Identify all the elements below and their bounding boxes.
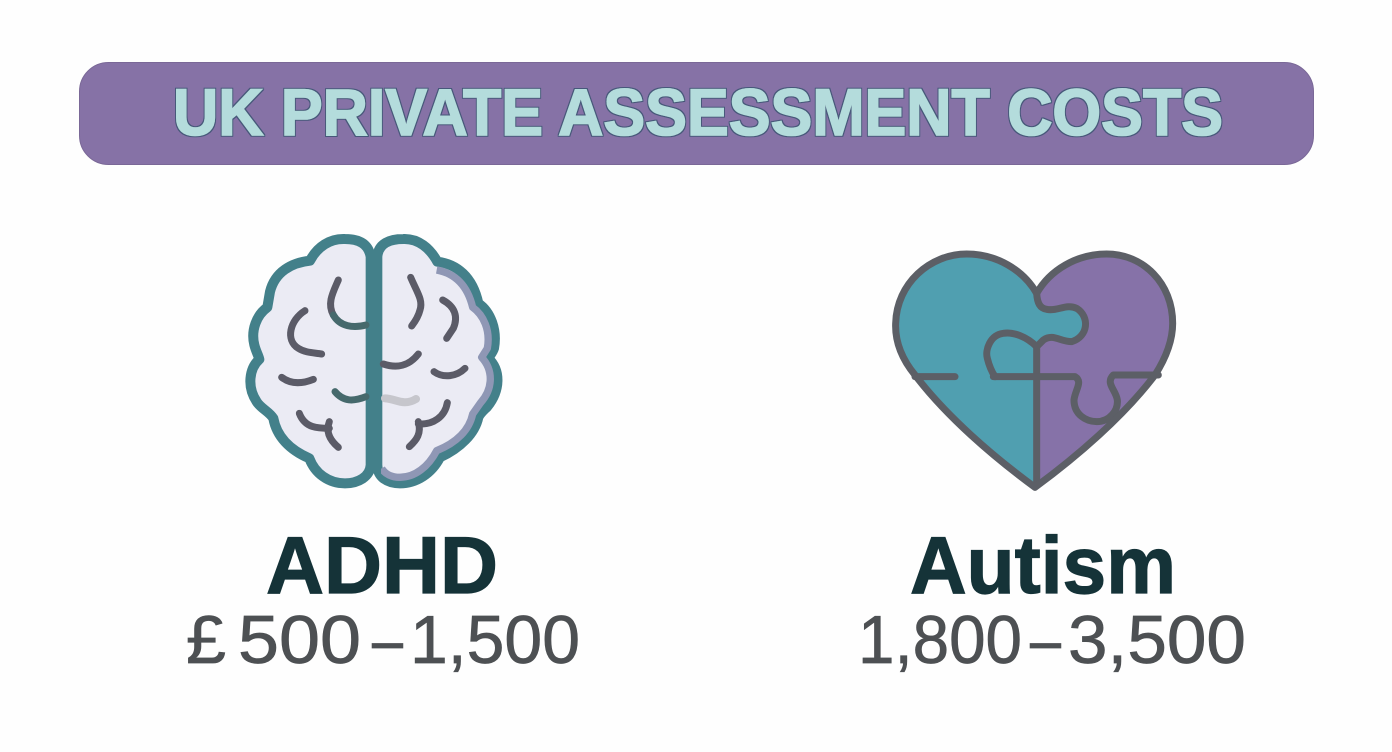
price: Autism cost bbox=[858, 602, 1246, 678]
heading: Autism: Autism bbox=[910, 521, 1176, 611]
price: ADHD cost: 1,500 bbox=[410, 602, 580, 678]
price: ADHD cost: £ bbox=[186, 602, 226, 678]
banner pill bbox=[80, 62, 1314, 164]
brain central divide bbox=[352, 252, 396, 473]
title banner bbox=[80, 62, 1314, 164]
title text: UK PRIVATE ASSESSMENT COSTS bbox=[173, 75, 1223, 149]
brain left hemisphere bbox=[250, 239, 371, 483]
price: Autism cost: 3,500 bbox=[1068, 602, 1246, 678]
icon: brain bbox=[250, 239, 497, 483]
brain right shading band bbox=[382, 270, 490, 477]
heart puzzle lines bbox=[896, 254, 1173, 487]
heading: ADHD: ADHD bbox=[266, 521, 498, 611]
price: ADHD cost: – bbox=[372, 602, 403, 678]
infographic canvas bbox=[79, 62, 1314, 672]
heart purple piece bbox=[1040, 258, 1170, 479]
icon: puzzle heart bbox=[896, 240, 1180, 493]
brain folds bbox=[282, 277, 465, 447]
heart teal piece bbox=[896, 254, 1173, 487]
brain right hemisphere bbox=[377, 239, 497, 483]
price: ADHD cost: 500 bbox=[238, 602, 361, 678]
price: Autism cost: – bbox=[1030, 602, 1061, 678]
price: ADHD cost bbox=[186, 602, 580, 678]
price: Autism cost: 1,800 bbox=[858, 602, 1022, 678]
